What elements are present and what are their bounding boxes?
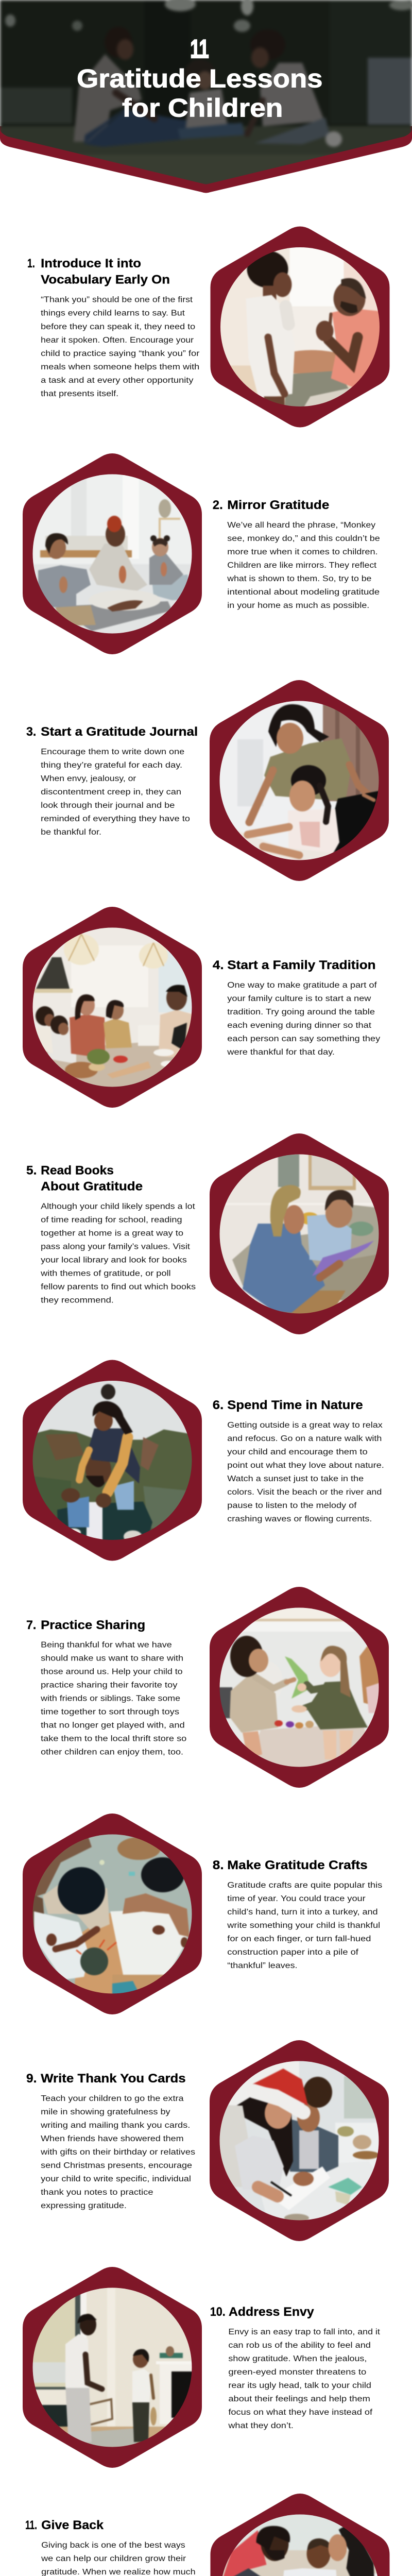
text block: lesson 8 <box>227 1881 383 1970</box>
text block: lesson 4: your family culture is to start a new <box>227 994 371 1003</box>
text block: lesson 7: Being thankful for what we have <box>41 1640 172 1650</box>
heading: 9: 9. <box>26 2072 37 2086</box>
text block: lesson 8: construction paper into a pile of <box>227 1948 359 1957</box>
text block: lesson 5: fellow parents to find out which books <box>41 1282 196 1291</box>
photo: daughter on father's shoulders <box>23 1360 202 1561</box>
text block: lesson 7: with friends or siblings. Take some <box>40 1694 180 1703</box>
text block: lesson 10: focus on what they have instead of <box>228 2408 373 2417</box>
heading: 10: 10. <box>210 2305 226 2319</box>
text block: lesson 1: meals when someone helps them with <box>41 363 199 371</box>
text block: lesson 2: We’ve all heard the phrase, “Monkey <box>227 521 375 530</box>
text block: lesson 4 <box>227 981 381 1057</box>
panel: lesson 4 <box>23 907 381 1108</box>
text block: lesson 4: were thankful for that day. <box>227 1048 335 1057</box>
heading: 1: 1. <box>27 257 35 270</box>
text block: lesson 7: time together to sort through toys <box>41 1707 179 1717</box>
text block: lesson 10 <box>228 2328 381 2430</box>
text block: lesson 7: other children can enjoy them, too. <box>41 1748 183 1757</box>
photo: mother helping daughter write <box>210 680 389 881</box>
text block: lesson 8: child’s hand, turn it into a turkey, and <box>227 1908 378 1917</box>
panel: lesson 7 <box>26 1587 389 1788</box>
heading: 7: Practice Sharing <box>41 1618 145 1632</box>
heading: 8: 8. <box>213 1858 224 1872</box>
text block: lesson 6: pause to listen to the melody of <box>227 1501 357 1510</box>
heading: 5: Read Books <box>41 1164 114 1178</box>
text block: lesson 4: tradition. Try going around the table <box>227 1008 375 1016</box>
title: for Children <box>122 94 283 123</box>
header banner <box>0 0 412 193</box>
text block: lesson 1: hear it spoken. Often. Encourage your <box>41 336 194 345</box>
text block: lesson 2: see, monkey do,” and this couldn’t be <box>227 534 380 543</box>
text block: lesson 7: practice sharing their favorite toy <box>41 1681 178 1690</box>
text block: lesson 7 <box>40 1640 186 1757</box>
photo: two girls sharing a toy <box>210 1587 389 1788</box>
text block: lesson 7: that no longer get played with, and <box>41 1721 185 1730</box>
header maroon chevron <box>0 126 412 193</box>
text block: lesson 8: “thankful” leaves. <box>227 1961 298 1970</box>
text block: lesson 9: thank you notes to practice <box>41 2188 153 2197</box>
panel: lesson 8 <box>23 1814 383 2014</box>
text block: lesson 7: should make us want to share with <box>41 1654 183 1663</box>
panel: lesson 6 <box>23 1360 384 1561</box>
text block: lesson 2: what is shown to them. So, try to be <box>227 574 371 583</box>
text block: lesson 3: look through their journal and be <box>41 801 175 810</box>
text block: lesson 4: One way to make gratitude a part of <box>227 981 377 990</box>
text block: lesson 10: Envy is an easy trap to fall into, and it <box>228 2328 381 2336</box>
heading: 4: Start a Family Tradition <box>227 958 376 972</box>
text block: lesson 9 <box>40 2094 195 2210</box>
text block: lesson 9: with gifts on their birthday or relatives <box>40 2148 195 2157</box>
text block: lesson 8: for on each finger, or turn fall-hued <box>227 1935 371 1943</box>
text block: lesson 11 <box>41 2541 196 2576</box>
text block: lesson 2: in your home as much as possible. <box>227 601 369 610</box>
text block: lesson 1: before they can speak it, they need to <box>41 323 195 331</box>
text block: lesson 10: show gratitude. When the jealous, <box>228 2354 367 2363</box>
text block: lesson 4: each person can say something they <box>227 1035 381 1043</box>
text block: lesson 3: reminded of everything they have to <box>41 815 190 823</box>
text block: lesson 6: point out what they love about nature. <box>227 1461 384 1470</box>
photo: father and son talking <box>23 2267 202 2468</box>
text block: lesson 1 <box>41 296 199 398</box>
text block: lesson 5: they recommend. <box>41 1296 114 1304</box>
heading: 10: Address Envy <box>229 2305 314 2319</box>
photo: mother and children meditating <box>23 453 202 654</box>
text block: lesson 9: writing and mailing thank you cards. <box>40 2121 190 2130</box>
title: Gratitude Lessons <box>77 64 322 93</box>
text block: lesson 9: expressing gratitude. <box>41 2201 127 2210</box>
text block: lesson 9: Teach your children to go the extra <box>41 2094 184 2103</box>
text block: lesson 1: that presents itself. <box>41 389 118 398</box>
text block: lesson 1: child to practice saying “thank you” for <box>41 349 199 358</box>
heading: 1 <box>27 257 170 286</box>
text block: lesson 2 <box>227 521 380 610</box>
text block: lesson 5: pass along your family’s values. Visit <box>41 1242 191 1251</box>
heading: 11: 11. <box>25 2518 37 2532</box>
panel: lesson 3 <box>26 680 389 881</box>
header photo: family sitting on grass <box>0 0 412 185</box>
text block: lesson 6: and refocus. Go on a nature walk with <box>227 1434 382 1443</box>
heading: 2: 2. <box>213 498 223 512</box>
text block: lesson 3: discontentment creep in, they can <box>41 788 181 796</box>
heading: 2: Mirror Gratitude <box>227 498 329 512</box>
text block: lesson 5: your local library and look for books <box>41 1256 187 1264</box>
heading: 3: 3. <box>26 725 36 739</box>
title: 11 <box>190 35 209 63</box>
heading: 9: Write Thank You Cards <box>41 2072 186 2086</box>
text block: lesson 6 <box>227 1421 384 1523</box>
text block: lesson 3: Encourage them to write down one <box>41 748 184 756</box>
panel: lesson 2 <box>23 453 380 654</box>
text block: lesson 4: each evening during dinner so that <box>227 1021 372 1030</box>
text block: lesson 9: your child to write specific, individual <box>41 2175 191 2183</box>
text block: lesson 3: thing they’re grateful for each day. <box>41 761 182 770</box>
text block: lesson 8: Gratitude crafts are quite popular this <box>227 1881 383 1890</box>
panel: lesson 11 <box>25 2494 389 2576</box>
heading: 6: 6. <box>213 1398 224 1412</box>
text block: lesson 11: Giving back is one of the best ways <box>41 2541 185 2550</box>
heading: 4: 4. <box>213 958 224 972</box>
panel: lesson 10 <box>23 2267 381 2468</box>
photo: father talking to child <box>210 227 389 428</box>
text block: lesson 10: what they don’t. <box>228 2421 294 2430</box>
text block: lesson 6: colors. Visit the beach or the river and <box>227 1488 382 1497</box>
text block: lesson 1: things every child learns to say. But <box>41 309 185 318</box>
text block: lesson 2: more true when it comes to children. <box>227 548 378 556</box>
text block: lesson 10: about their feelings and help them <box>228 2395 370 2403</box>
heading: 7: 7. <box>26 1618 36 1632</box>
photo: mother and son reading <box>210 1133 389 1334</box>
title <box>77 35 322 123</box>
text block: lesson 10: can rob us of the ability to feel and <box>228 2341 371 2350</box>
heading: 5: 5. <box>26 1164 37 1178</box>
heading: 11: Give Back <box>41 2518 104 2532</box>
heading: 1: Introduce It into <box>41 257 141 270</box>
heading: 3: Start a Gratitude Journal <box>41 725 198 739</box>
text block: lesson 6: your child and encourage them to <box>227 1448 368 1456</box>
text block: lesson 3 <box>41 748 190 837</box>
text block: lesson 9: mile in showing gratefulness by <box>41 2108 170 2116</box>
photo: children drawing on the floor <box>23 1814 202 2014</box>
text block: lesson 8: write something your child is thankful <box>227 1921 380 1930</box>
text block: lesson 5: with themes of gratitude, or poll <box>40 1269 171 1278</box>
text block: lesson 3: be thankful for. <box>41 828 101 837</box>
text block: lesson 9: When friends have showered them <box>41 2134 184 2143</box>
photo: family collecting trash on the beach <box>210 2494 389 2576</box>
text block: lesson 5: of time reading for school, reading <box>41 1215 182 1224</box>
heading: 8: Make Gratitude Crafts <box>227 1858 368 1872</box>
text block: lesson 11: we can help our children grow their <box>41 2554 186 2563</box>
text block: lesson 1: a task and at every other opportunity <box>41 376 194 385</box>
text block: lesson 2: intentional about modeling gratitude <box>227 588 380 597</box>
text block: lesson 1: “Thank you” should be one of the first <box>41 296 193 304</box>
text block: lesson 5 <box>40 1202 196 1304</box>
heading: 1: Vocabulary Early On <box>41 273 170 286</box>
photo: mother and son writing a card <box>210 2040 389 2241</box>
text block: lesson 9: send Christmas presents, encourage <box>41 2161 192 2170</box>
panel: lesson 1 <box>27 227 389 428</box>
text block: lesson 10: green-eyed monster threatens to <box>228 2368 366 2377</box>
text block: lesson 6: crashing waves or flowing currents. <box>227 1515 372 1523</box>
text block: lesson 6: Getting outside is a great way to relax <box>227 1421 383 1430</box>
text block: lesson 8: time of year. You could trace your <box>227 1894 366 1903</box>
heading: 6: Spend Time in Nature <box>227 1398 363 1412</box>
text block: lesson 7: those around us. Help your child to <box>41 1667 183 1676</box>
text block: lesson 5: Although your child likely spends a lot <box>41 1202 195 1211</box>
panel: lesson 5 <box>26 1133 389 1334</box>
photo: family in kitchen <box>23 907 202 1108</box>
text block: lesson 5: together at home is a great way to <box>41 1229 183 1238</box>
text block: lesson 2: Children are like mirrors. They reflect <box>227 561 377 570</box>
panel: lesson 9 <box>26 2040 389 2241</box>
heading: 5: About Gratitude <box>41 1180 143 1194</box>
text block: lesson 7: take them to the local thrift store so <box>41 1734 186 1743</box>
text block: lesson 3: When envy, jealousy, or <box>41 774 136 783</box>
heading: 5 <box>26 1164 143 1194</box>
text block: lesson 10: rear its ugly head, talk to your child <box>228 2381 371 2390</box>
text block: lesson 6: Watch a sunset just to take in the <box>227 1475 364 1483</box>
